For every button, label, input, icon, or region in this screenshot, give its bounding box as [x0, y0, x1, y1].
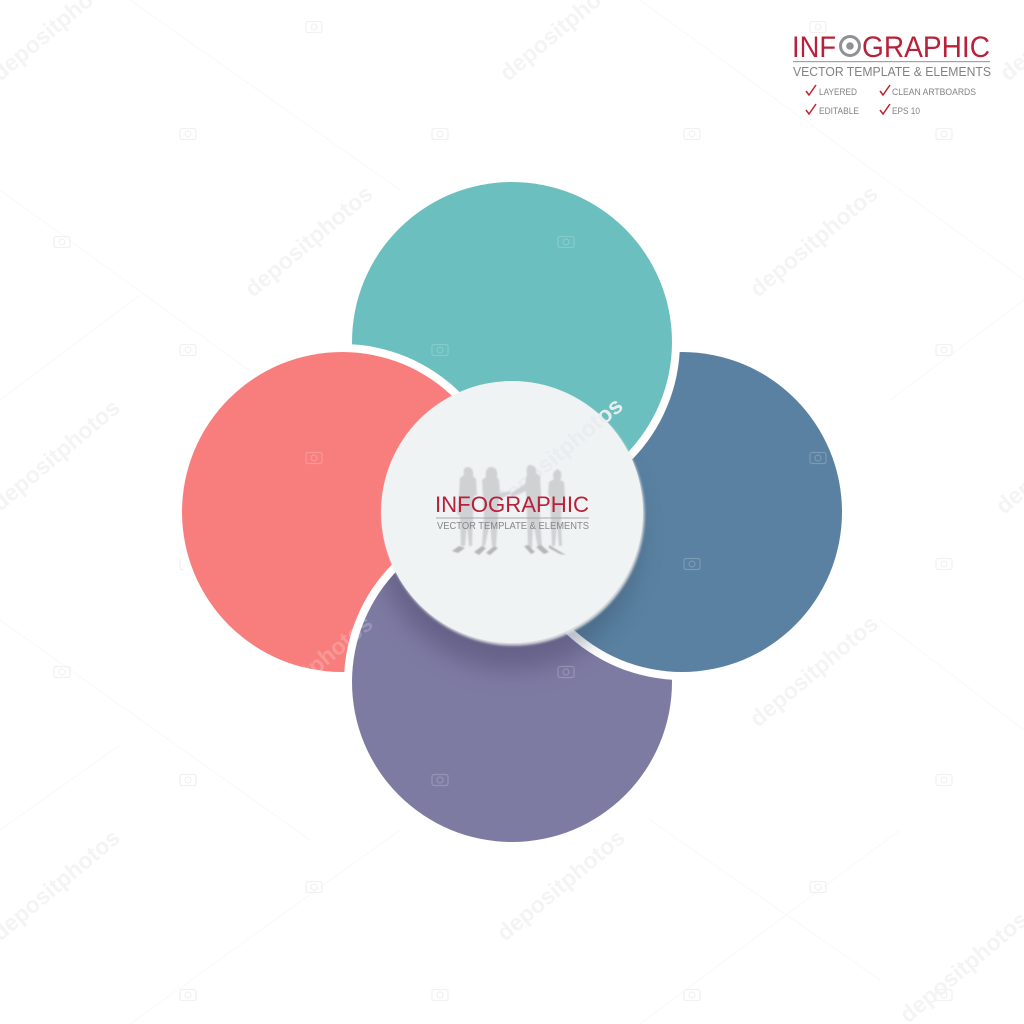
watermark overlay on circles: depositphotos — [240, 610, 378, 732]
watermark overlay on circles — [240, 236, 826, 786]
watermark overlay on circles: depositphotos — [490, 392, 628, 514]
feature checklist: LAYERED — [819, 87, 857, 97]
watermark pattern: depositphotos — [745, 610, 883, 732]
panel: teal circle — [352, 182, 672, 502]
logo subtitle: VECTOR TEMPLATE & ELEMENTS — [793, 65, 991, 79]
panel: purple circle — [344, 564, 672, 842]
feature checklist: EPS 10 — [892, 106, 920, 116]
watermark pattern: depositphotos — [745, 180, 883, 302]
panel: coral circle — [174, 344, 510, 680]
feature checklist: EDITABLE — [819, 106, 859, 116]
panel: blue circle — [566, 352, 842, 680]
feature checklist — [806, 85, 976, 116]
icon: target O — [840, 36, 860, 56]
logo word: INF: INF — [792, 31, 836, 64]
watermark pattern: depositphotos — [240, 180, 378, 302]
panel: center circle — [381, 381, 644, 646]
watermark pattern: depositphotos — [492, 824, 630, 946]
watermark on center circle: depositphotos — [490, 392, 628, 514]
panel: teal circle overlap on blue — [564, 344, 680, 460]
silhouettes of four people — [452, 465, 566, 555]
logo word: GRAPHIC: GRAPHIC — [862, 31, 990, 64]
header logo — [792, 31, 991, 79]
center logo text: VECTOR TEMPLATE & ELEMENTS — [437, 520, 589, 532]
center logo text — [435, 492, 589, 532]
feature checklist: CLEAN ARTBOARDS — [892, 87, 976, 97]
center logo text: INFOGRAPHIC — [435, 492, 589, 517]
